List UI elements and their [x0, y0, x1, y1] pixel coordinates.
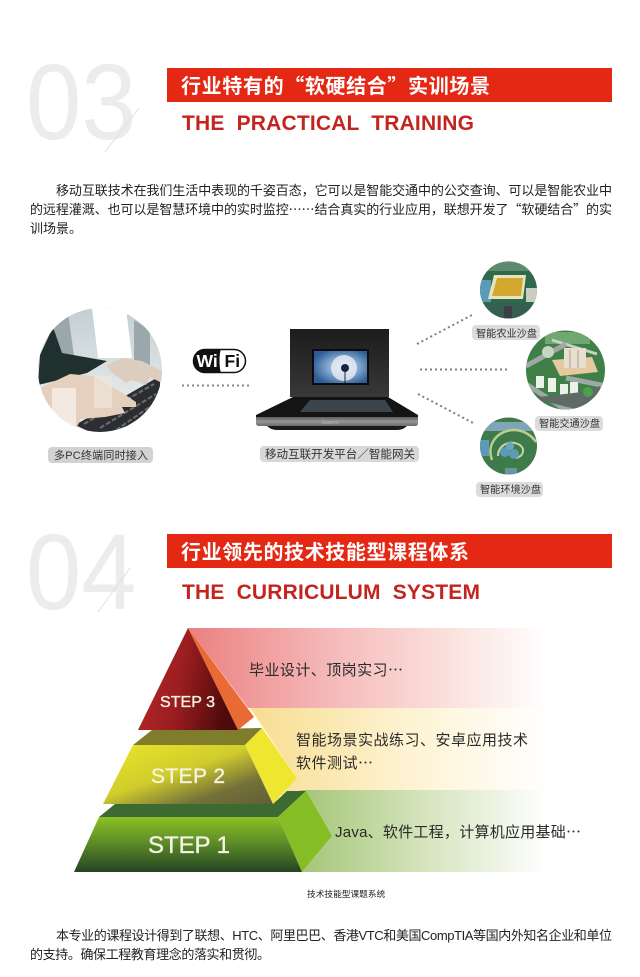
- heading bar: practical training: 行业特有的“软硬结合”实训场景: [181, 70, 490, 99]
- pyramid level: step 1: STEP 1: [148, 832, 230, 859]
- pyramid level: step 2: STEP 2: [151, 765, 225, 788]
- intro paragraph: 训场景。: [30, 221, 82, 236]
- pyramid chart: [74, 628, 581, 872]
- heading bar: practical training: [167, 68, 612, 102]
- band: step 2 content: [250, 708, 548, 795]
- section number 03: 03: [26, 41, 137, 162]
- band: step 1 content: Java、软件工程，计算机应用基础…: [335, 821, 581, 842]
- band: step 1 content: [300, 790, 581, 872]
- heading bar: curriculum system: 行业领先的技术技能型课程体系: [181, 541, 469, 564]
- dotted connector: pc to gateway: [182, 384, 250, 386]
- closing paragraph: 本专业的课程设计得到了联想、HTC、阿里巴巴、香港VTC和美国CompTIA等国内外知名企业和单位: [56, 928, 612, 943]
- band: step 3 content: [188, 628, 548, 708]
- closing paragraph: [30, 928, 612, 962]
- icon: wifi badge: Fi: [224, 351, 240, 371]
- pyramid level: step 3: [138, 628, 254, 730]
- photo: traffic sand table: [526, 330, 606, 410]
- caption: 技术技能型课题系统: [307, 888, 386, 899]
- label: agriculture: 智能农业沙盘: [476, 327, 537, 340]
- icon: wifi badge: Wi: [196, 351, 218, 371]
- icon: wifi badge: [193, 349, 246, 373]
- pyramid level: step 2: [103, 728, 297, 804]
- section number 04: 04: [26, 511, 137, 632]
- subtitle: the curriculum system: THE CURRICULUM SYSTEM: [182, 581, 480, 604]
- band: step 2 content: 软件测试…: [296, 752, 373, 773]
- label: agriculture: [472, 325, 540, 340]
- label: gateway: 移动互联开发平台／智能网关: [265, 447, 416, 461]
- label: traffic: [535, 416, 603, 431]
- intro paragraph: [30, 183, 612, 236]
- pyramid level: step 1: [74, 791, 332, 872]
- label: traffic: 智能交通沙盘: [539, 417, 600, 430]
- closing paragraph: 的支持。确保工程教育理念的落实和贯彻。: [30, 947, 270, 962]
- photo: agriculture sand table: [480, 261, 538, 319]
- device: mobile internet gateway: [256, 329, 418, 430]
- label: environment: 智能环境沙盘: [480, 483, 541, 496]
- device: mobile internet gateway: lenovo: [322, 420, 338, 426]
- photo: environment sand table: [480, 417, 538, 475]
- band: step 2 content: 智能场景实战练习、安卓应用技术: [296, 731, 528, 749]
- band: step 3 content: 毕业设计、顶岗实习…: [249, 659, 403, 680]
- intro paragraph: 移动互联技术在我们生活中表现的千姿百态，它可以是智能交通中的公交查询、可以是智能农业中: [56, 183, 612, 198]
- label: pc terminals: 多PC终端同时接入: [54, 448, 148, 462]
- pyramid level: step 3: STEP 3: [160, 694, 215, 711]
- label: environment: [476, 482, 543, 497]
- subtitle: the practical training: THE PRACTICAL TRAINING: [182, 112, 474, 135]
- dotted connectors: gateway to sand tables: [417, 315, 507, 424]
- photo: hands on keyboard: [36, 308, 162, 434]
- intro paragraph: 的远程灌溉、也可以是智慧环境中的实时监控……结合真实的行业应用，联想开发了“软硬结合”的实: [30, 199, 612, 218]
- label: pc terminals: [48, 447, 153, 463]
- heading bar: curriculum system: [167, 534, 612, 568]
